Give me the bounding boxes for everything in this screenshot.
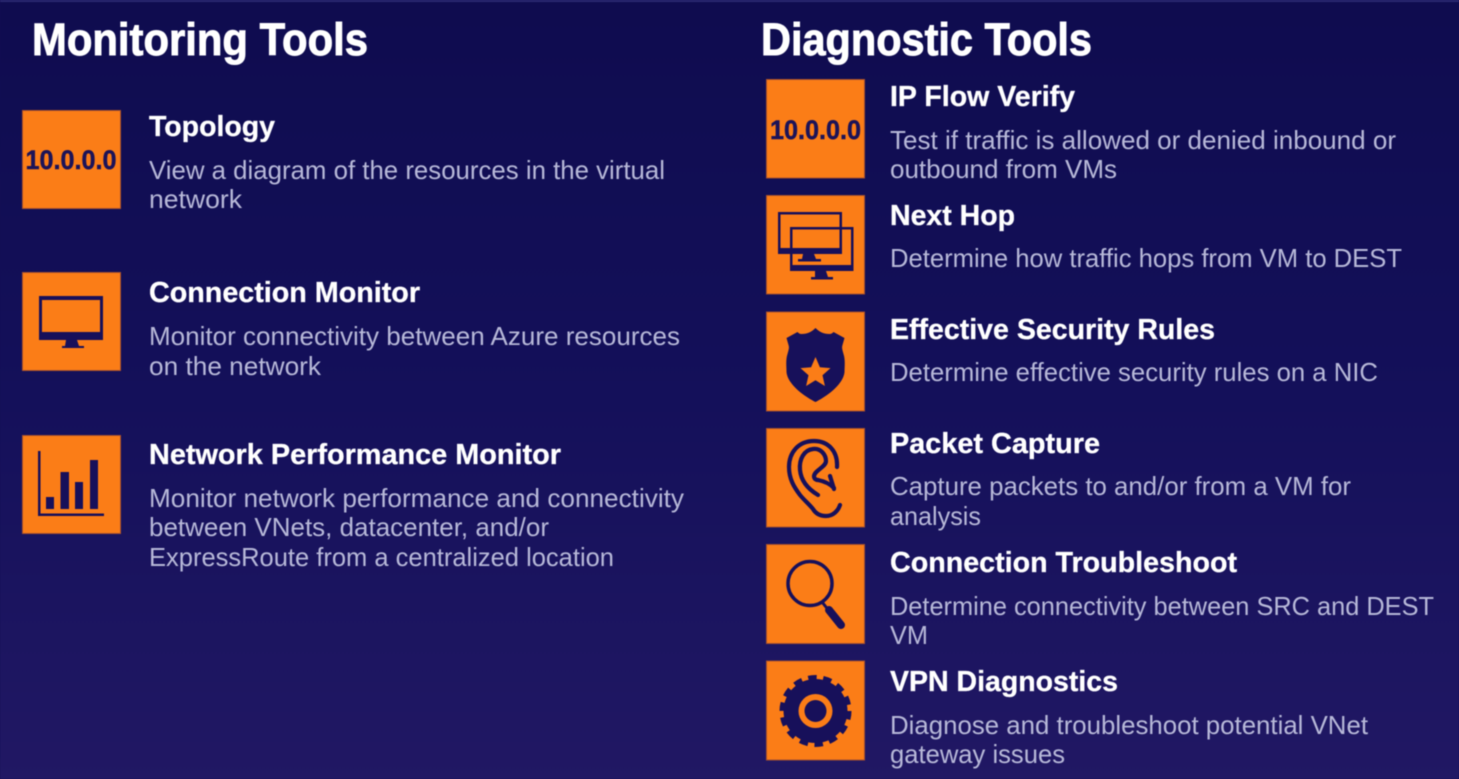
text: packet capture: Capture packets to and/or from a VM for — [890, 471, 1351, 501]
icon: 10.0.0.0 address — [22, 110, 120, 208]
icon: 10.0.0.0 address: 10.0.0.0 — [26, 145, 116, 175]
text: vpn diagnostics: VPN Diagnostics — [890, 666, 1118, 698]
item: connection monitor — [22, 272, 680, 381]
text: next hop: Determine how traffic hops from VM to DEST — [890, 243, 1402, 273]
icon: monitor — [22, 272, 120, 370]
text: next hop: Next Hop — [890, 200, 1015, 232]
item: effective security rules — [766, 312, 1378, 411]
heading: monitoring tools: Monitoring Tools — [32, 14, 368, 65]
text: connection monitor — [149, 277, 680, 381]
item: topology — [22, 110, 665, 214]
text: ip flow verify: Test if traffic is allowed or denied inbound or — [890, 125, 1396, 155]
text: network performance monitor: Monitor network performance and connectivity — [149, 483, 684, 513]
item: ip flow verify — [766, 80, 1396, 184]
text: topology: network — [149, 184, 243, 214]
text: effective security rules: Determine effective security rules on a NIC — [890, 357, 1378, 387]
icon: bar chart — [22, 436, 120, 534]
icon: ear — [766, 428, 864, 527]
text: connection troubleshoot: VM — [890, 620, 928, 650]
text: packet capture: Packet Capture — [890, 428, 1100, 460]
item: vpn diagnostics — [766, 661, 1369, 769]
text: effective security rules: Effective Security Rules — [890, 314, 1215, 346]
text: connection troubleshoot: Connection Troubleshoot — [890, 547, 1238, 579]
icon: magnifying glass — [766, 544, 864, 644]
text: connection monitor: Connection Monitor — [149, 277, 420, 309]
text: connection troubleshoot: Determine connectivity between SRC and DEST — [890, 591, 1434, 621]
text: connection troubleshoot — [890, 547, 1434, 650]
item: next hop — [766, 196, 1402, 294]
text: connection monitor: Monitor connectivity between Azure resources — [149, 321, 680, 351]
text: network performance monitor: between VNets, datacenter, and/or — [149, 512, 549, 542]
text: ip flow verify — [890, 81, 1396, 184]
text: ip flow verify: outbound from VMs — [890, 154, 1117, 184]
text: ip flow verify: IP Flow Verify — [890, 81, 1075, 113]
text: network performance monitor — [149, 439, 684, 572]
item: connection troubleshoot — [766, 544, 1434, 650]
icon: 10.0.0.0 address: 10.0.0.0 — [770, 115, 861, 145]
icon: shield with star — [766, 312, 864, 411]
text: topology: View a diagram of the resources in the virtual — [149, 155, 665, 185]
text: network performance monitor: ExpressRoute from a centralized location — [149, 542, 614, 572]
text: topology — [149, 111, 665, 214]
text: packet capture: analysis — [890, 501, 981, 531]
icon: gear — [766, 661, 864, 760]
text: network performance monitor: Network Performance Monitor — [149, 439, 561, 471]
icon: two monitors — [766, 196, 864, 294]
text: topology: Topology — [149, 111, 275, 143]
text: vpn diagnostics — [890, 666, 1369, 769]
text: effective security rules — [890, 314, 1378, 387]
panel: monitoring tools — [22, 14, 684, 572]
heading: diagnostic tools: Diagnostic Tools — [761, 14, 1092, 65]
text: vpn diagnostics: gateway issues — [890, 739, 1065, 769]
text: next hop — [890, 200, 1402, 273]
item: network performance monitor — [22, 436, 684, 572]
text: vpn diagnostics: Diagnose and troubleshoot potential VNet — [890, 710, 1369, 740]
icon: 10.0.0.0 address — [766, 80, 864, 178]
panel: diagnostic tools — [761, 14, 1434, 769]
item: packet capture — [766, 428, 1351, 531]
text: packet capture — [890, 428, 1351, 531]
text: connection monitor: on the network — [149, 351, 322, 381]
